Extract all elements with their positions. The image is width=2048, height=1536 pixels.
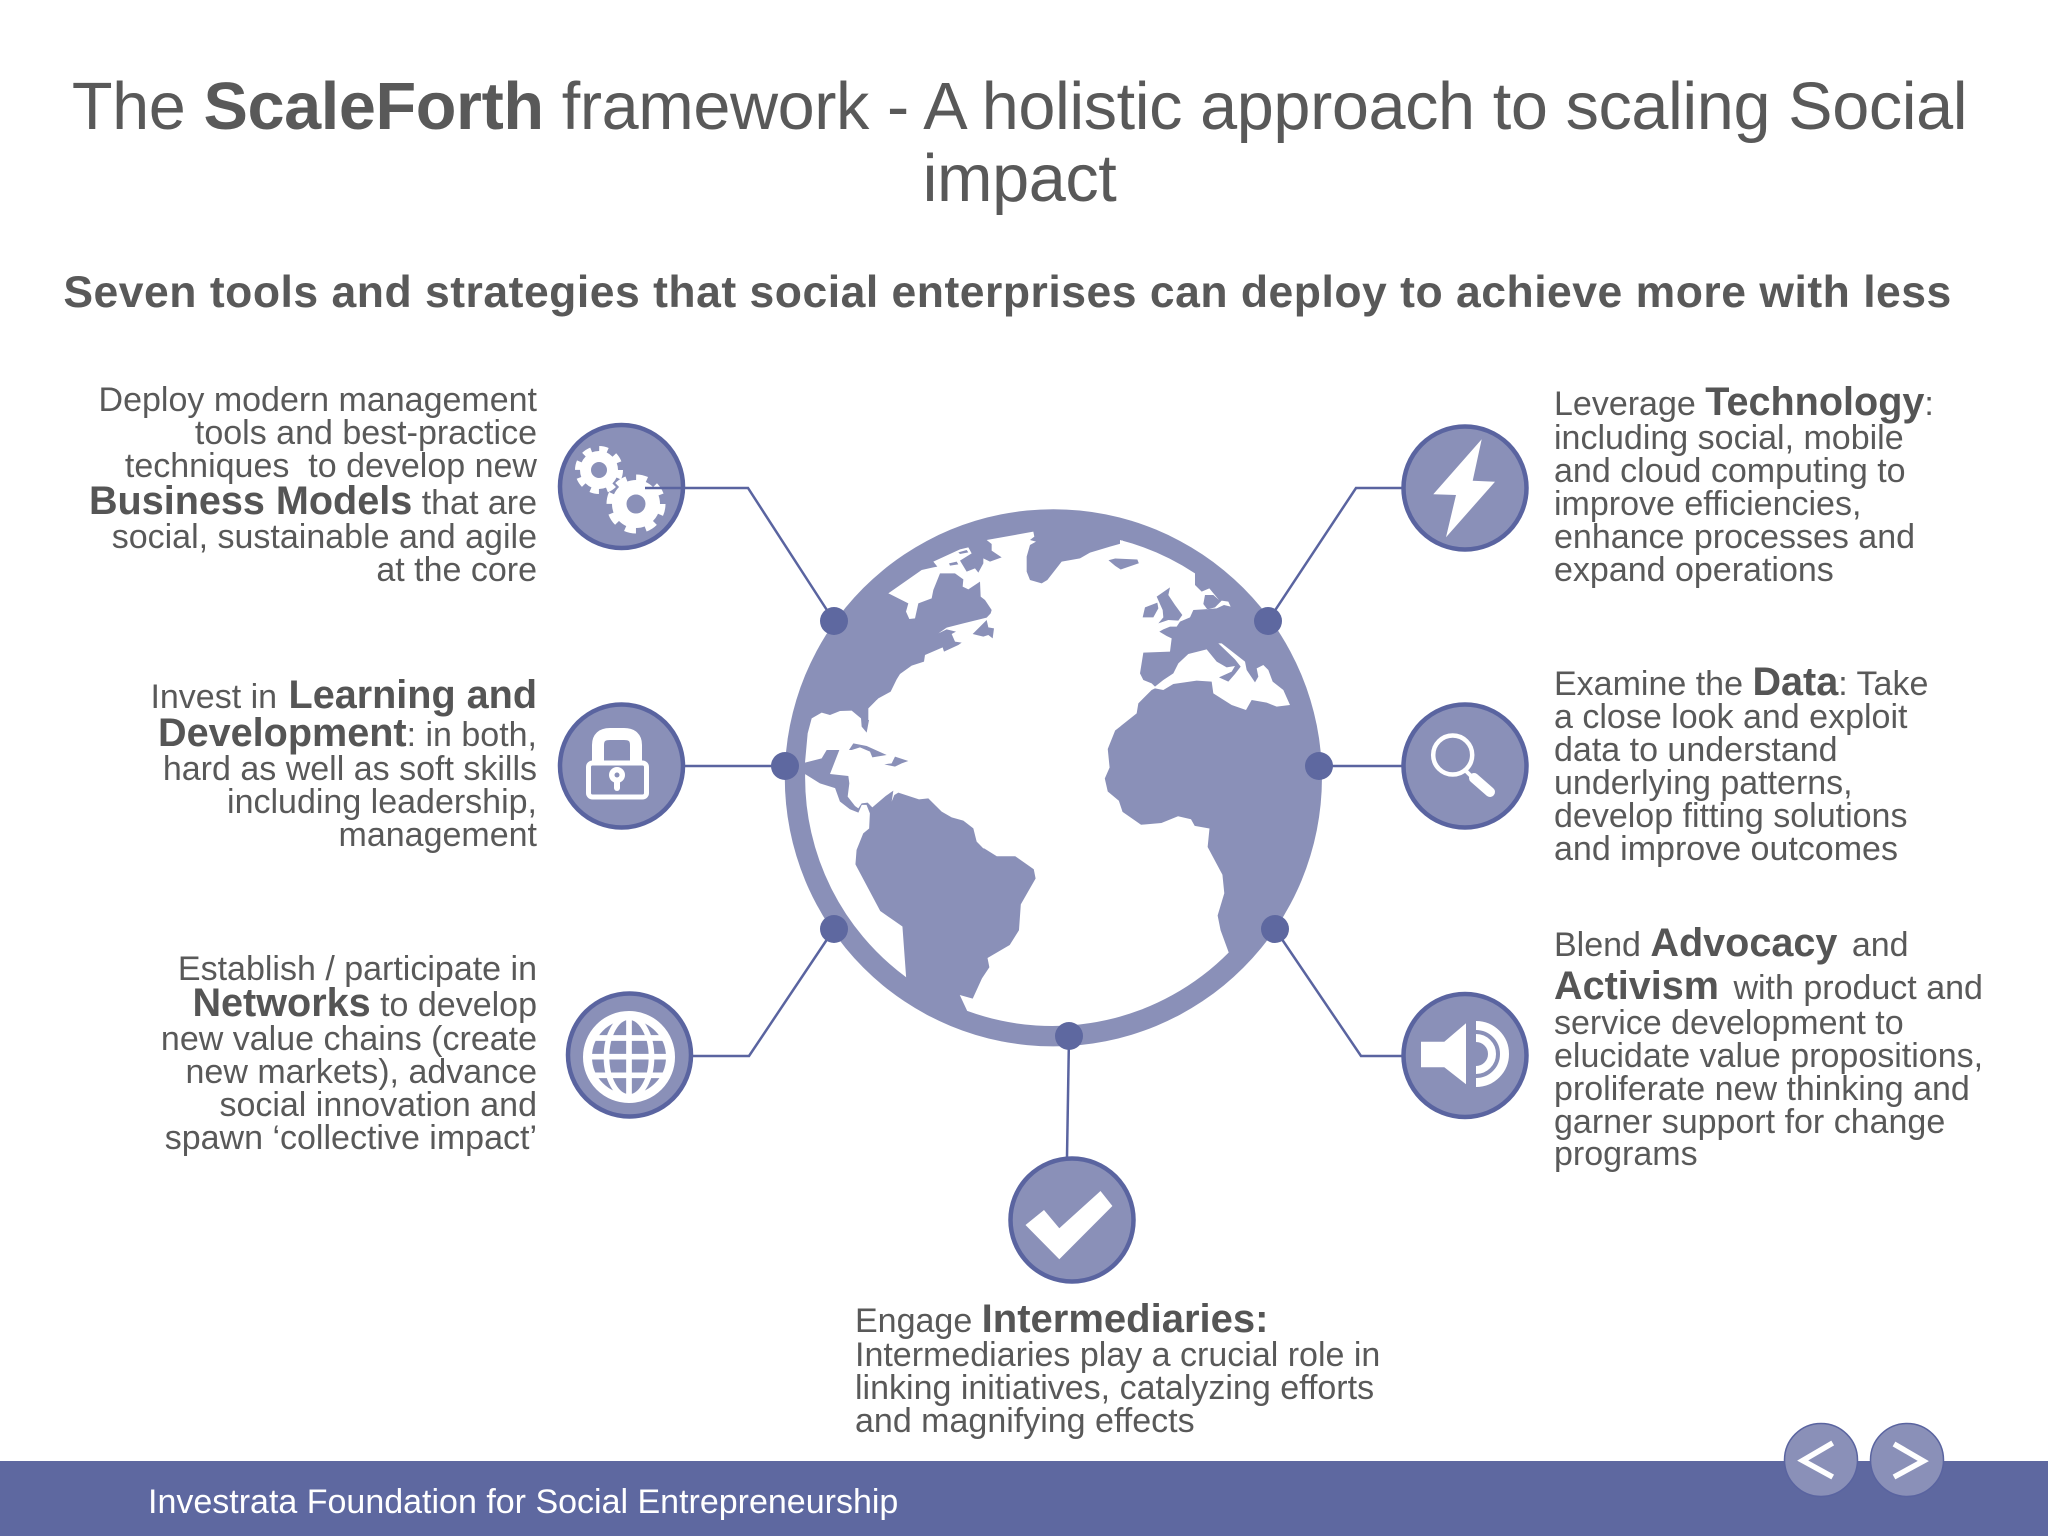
icon: check mark	[1010, 1158, 1134, 1282]
subtitle: Seven tools and strategies that social enterprises can deploy to achieve more with less	[63, 268, 1952, 317]
text: learning and development: including leadership,	[227, 783, 537, 821]
text: learning and development: hard as well as soft skills	[163, 750, 537, 788]
icon: speaker	[1404, 994, 1526, 1117]
text: advocacy and activism	[1554, 921, 1983, 1173]
text: business models: Business Models that are	[89, 479, 537, 523]
title	[72, 70, 1967, 216]
next button	[1870, 1424, 1944, 1496]
text: data	[1554, 660, 1928, 868]
text: business models: tools and best-practice	[195, 414, 537, 452]
text: business models	[89, 381, 538, 589]
text: advocacy and activism: Activism with product and	[1554, 964, 1983, 1008]
text: technology: including social, mobile	[1554, 419, 1904, 457]
text: advocacy and activism: service development to	[1554, 1004, 1904, 1042]
text: advocacy and activism: programs	[1554, 1135, 1698, 1173]
text: data: a close look and exploit	[1554, 698, 1908, 736]
text: networks: new markets), advance	[186, 1053, 537, 1091]
text: business models: at the core	[376, 551, 537, 589]
text: learning and development: management	[339, 816, 538, 854]
text: advocacy and activism: proliferate new thinking and	[1554, 1070, 1970, 1108]
footer text: Investrata Foundation for Social Entrepreneurship	[148, 1483, 898, 1521]
text: technology: and cloud computing to	[1554, 452, 1906, 490]
text: networks: Networks to develop	[192, 981, 537, 1025]
previous button	[1784, 1424, 1858, 1496]
text: intermediaries	[855, 1297, 1380, 1440]
text: technology: expand operations	[1554, 551, 1834, 589]
text: technology: enhance processes and	[1554, 518, 1915, 556]
text: business models: Deploy modern management	[99, 381, 538, 419]
text: networks	[161, 950, 537, 1157]
icon: magnifying glass	[1404, 704, 1526, 828]
text: intermediaries: and magnifying effects	[855, 1402, 1195, 1440]
text: data: develop fitting solutions	[1554, 797, 1907, 835]
text: learning and development	[150, 673, 538, 854]
title: The ScaleForth framework - A holistic approach to scaling Social	[72, 70, 1967, 144]
text: advocacy and activism: elucidate value propositions,	[1554, 1037, 1983, 1075]
text: technology: improve efficiencies,	[1554, 485, 1861, 523]
text: learning and development: Invest in Learning and	[150, 673, 537, 717]
globe	[784, 509, 1322, 1046]
text: networks: new value chains (create	[161, 1020, 537, 1058]
text: intermediaries: Intermediaries play a crucial role in	[855, 1336, 1380, 1374]
title: impact	[923, 142, 1117, 216]
text: intermediaries: Engage Intermediaries:	[855, 1297, 1268, 1341]
globe connector dots	[771, 607, 1333, 1050]
icon: padlock	[560, 704, 683, 828]
text: advocacy and activism: Blend Advocacy and	[1554, 921, 1909, 965]
footer bar	[0, 1461, 2048, 1536]
text: technology	[1554, 380, 1934, 589]
text: advocacy and activism: garner support for change	[1554, 1103, 1945, 1141]
text: data: underlying patterns,	[1554, 764, 1853, 802]
icon: lightning bolt	[1404, 426, 1526, 550]
text: intermediaries: linking initiatives, catalyzing efforts	[855, 1369, 1374, 1407]
text: business models: techniques to develop new	[125, 447, 537, 485]
text: data: data to understand	[1554, 731, 1838, 769]
text: networks: Establish / participate in	[178, 950, 537, 988]
text: data: Examine the Data: Take	[1554, 660, 1928, 704]
text: technology: Leverage Technology:	[1554, 380, 1934, 424]
icon: world grid	[568, 994, 691, 1116]
connector lines	[645, 488, 1402, 1157]
text: business models: social, sustainable and agile	[112, 518, 537, 556]
text: data: and improve outcomes	[1554, 830, 1898, 868]
icon: gears	[560, 425, 685, 548]
text: learning and development: Development: in both,	[158, 711, 537, 755]
text: networks: spawn ‘collective impact’	[165, 1119, 537, 1157]
text: networks: social innovation and	[219, 1086, 537, 1124]
